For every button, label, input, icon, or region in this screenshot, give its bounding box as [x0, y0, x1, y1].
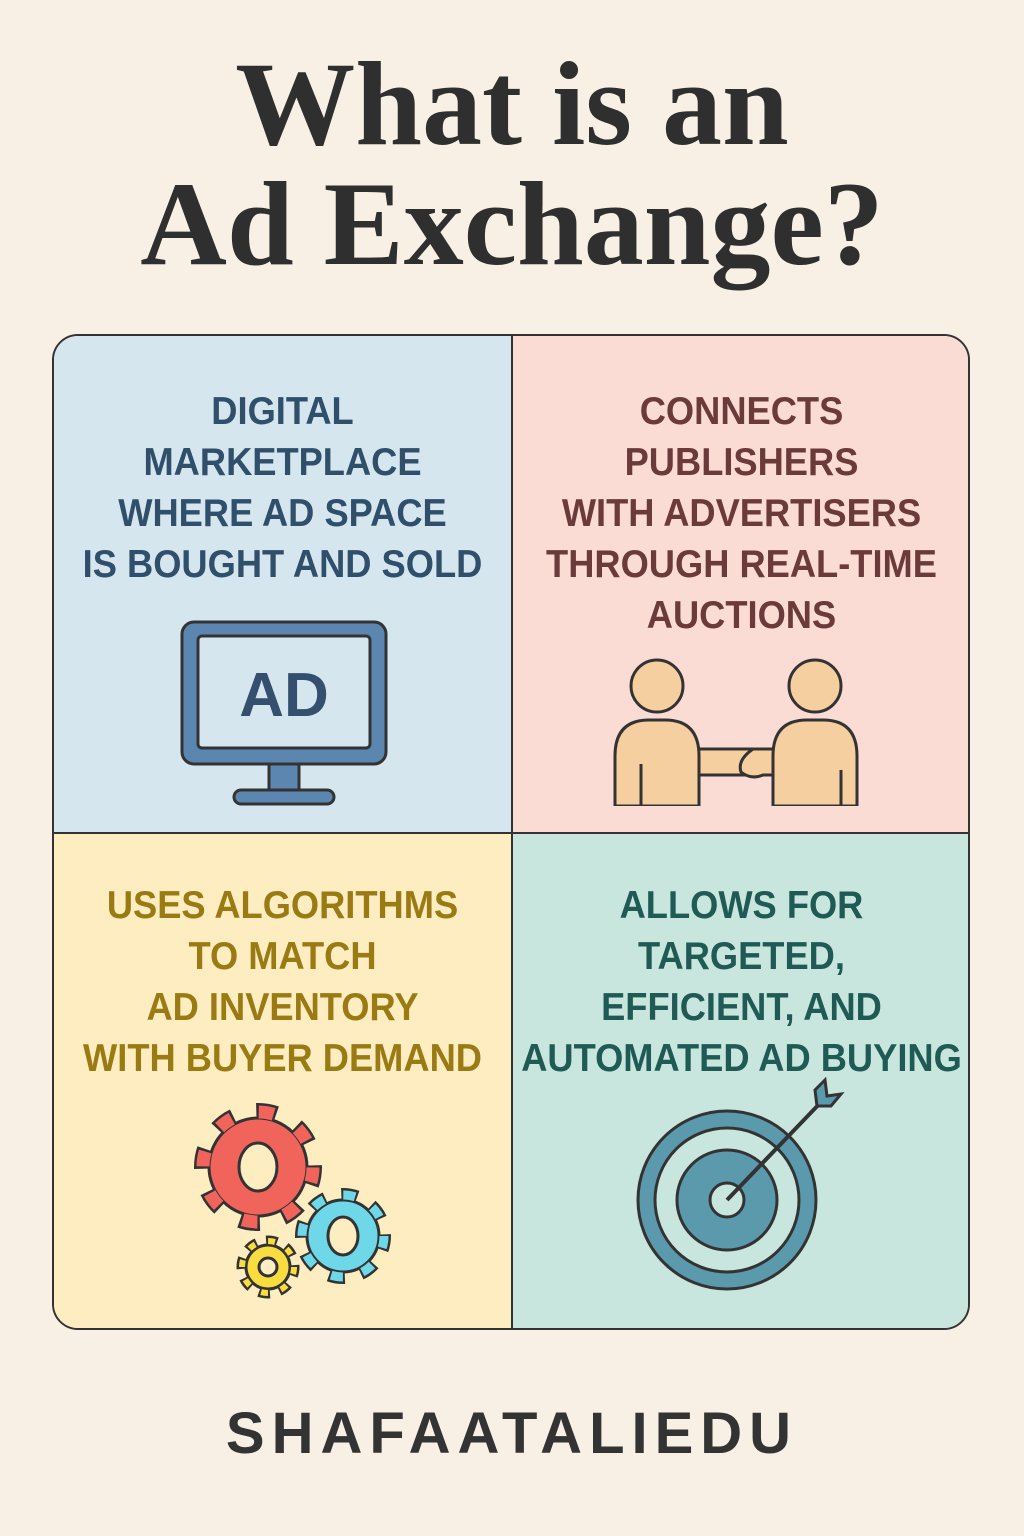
text: connects: CONNECTS: [640, 390, 843, 433]
cyan gear: [302, 1195, 384, 1277]
text: algorithms: [83, 884, 482, 1080]
text: targeted: TARGETED,: [638, 935, 845, 978]
text: algorithms: WITH BUYER DEMAND: [83, 1037, 482, 1080]
text: targeted: EFFICIENT, AND: [601, 986, 882, 1029]
text: targeted: ALLOWS FOR: [620, 884, 863, 927]
text: algorithms: USES ALGORITHMS: [107, 884, 458, 927]
panel: digital marketplace: [54, 336, 513, 834]
icon: monitor with AD: AD: [239, 661, 329, 730]
text: marketplace: DIGITAL: [211, 390, 354, 433]
panel: connects publishers: [513, 336, 970, 834]
grid of four panels: [52, 334, 970, 1330]
text: connects: WITH ADVERTISERS: [562, 492, 921, 535]
text: connects: PUBLISHERS: [625, 441, 858, 484]
title: Ad Exchange?: [140, 157, 884, 290]
text: algorithms: TO MATCH: [188, 935, 377, 978]
text: algorithms: AD INVENTORY: [146, 986, 419, 1029]
title: [140, 37, 884, 290]
text: marketplace: IS BOUGHT AND SOLD: [83, 543, 482, 586]
text: targeted: [521, 884, 962, 1080]
footer brand: SHAFAATALIEDU: [226, 1401, 798, 1466]
text: connects: [546, 390, 937, 637]
yellow gear: [242, 1241, 294, 1293]
text: connects: AUCTIONS: [647, 594, 836, 637]
panel: algorithms: [54, 834, 513, 1330]
icon: handshake: [614, 658, 858, 806]
panel: targeted buying: [513, 834, 970, 1330]
red gear: [203, 1112, 313, 1222]
text: targeted: AUTOMATED AD BUYING: [521, 1037, 962, 1080]
text: connects: THROUGH REAL-TIME: [546, 543, 937, 586]
icon: monitor with AD: [180, 620, 388, 806]
icon: target with arrow: [636, 1076, 844, 1290]
text: marketplace: [83, 390, 482, 586]
text: marketplace: MARKETPLACE: [143, 441, 422, 484]
title: What is an: [235, 37, 789, 170]
text: marketplace: WHERE AD SPACE: [118, 492, 447, 535]
icon: gears: [194, 1103, 391, 1298]
